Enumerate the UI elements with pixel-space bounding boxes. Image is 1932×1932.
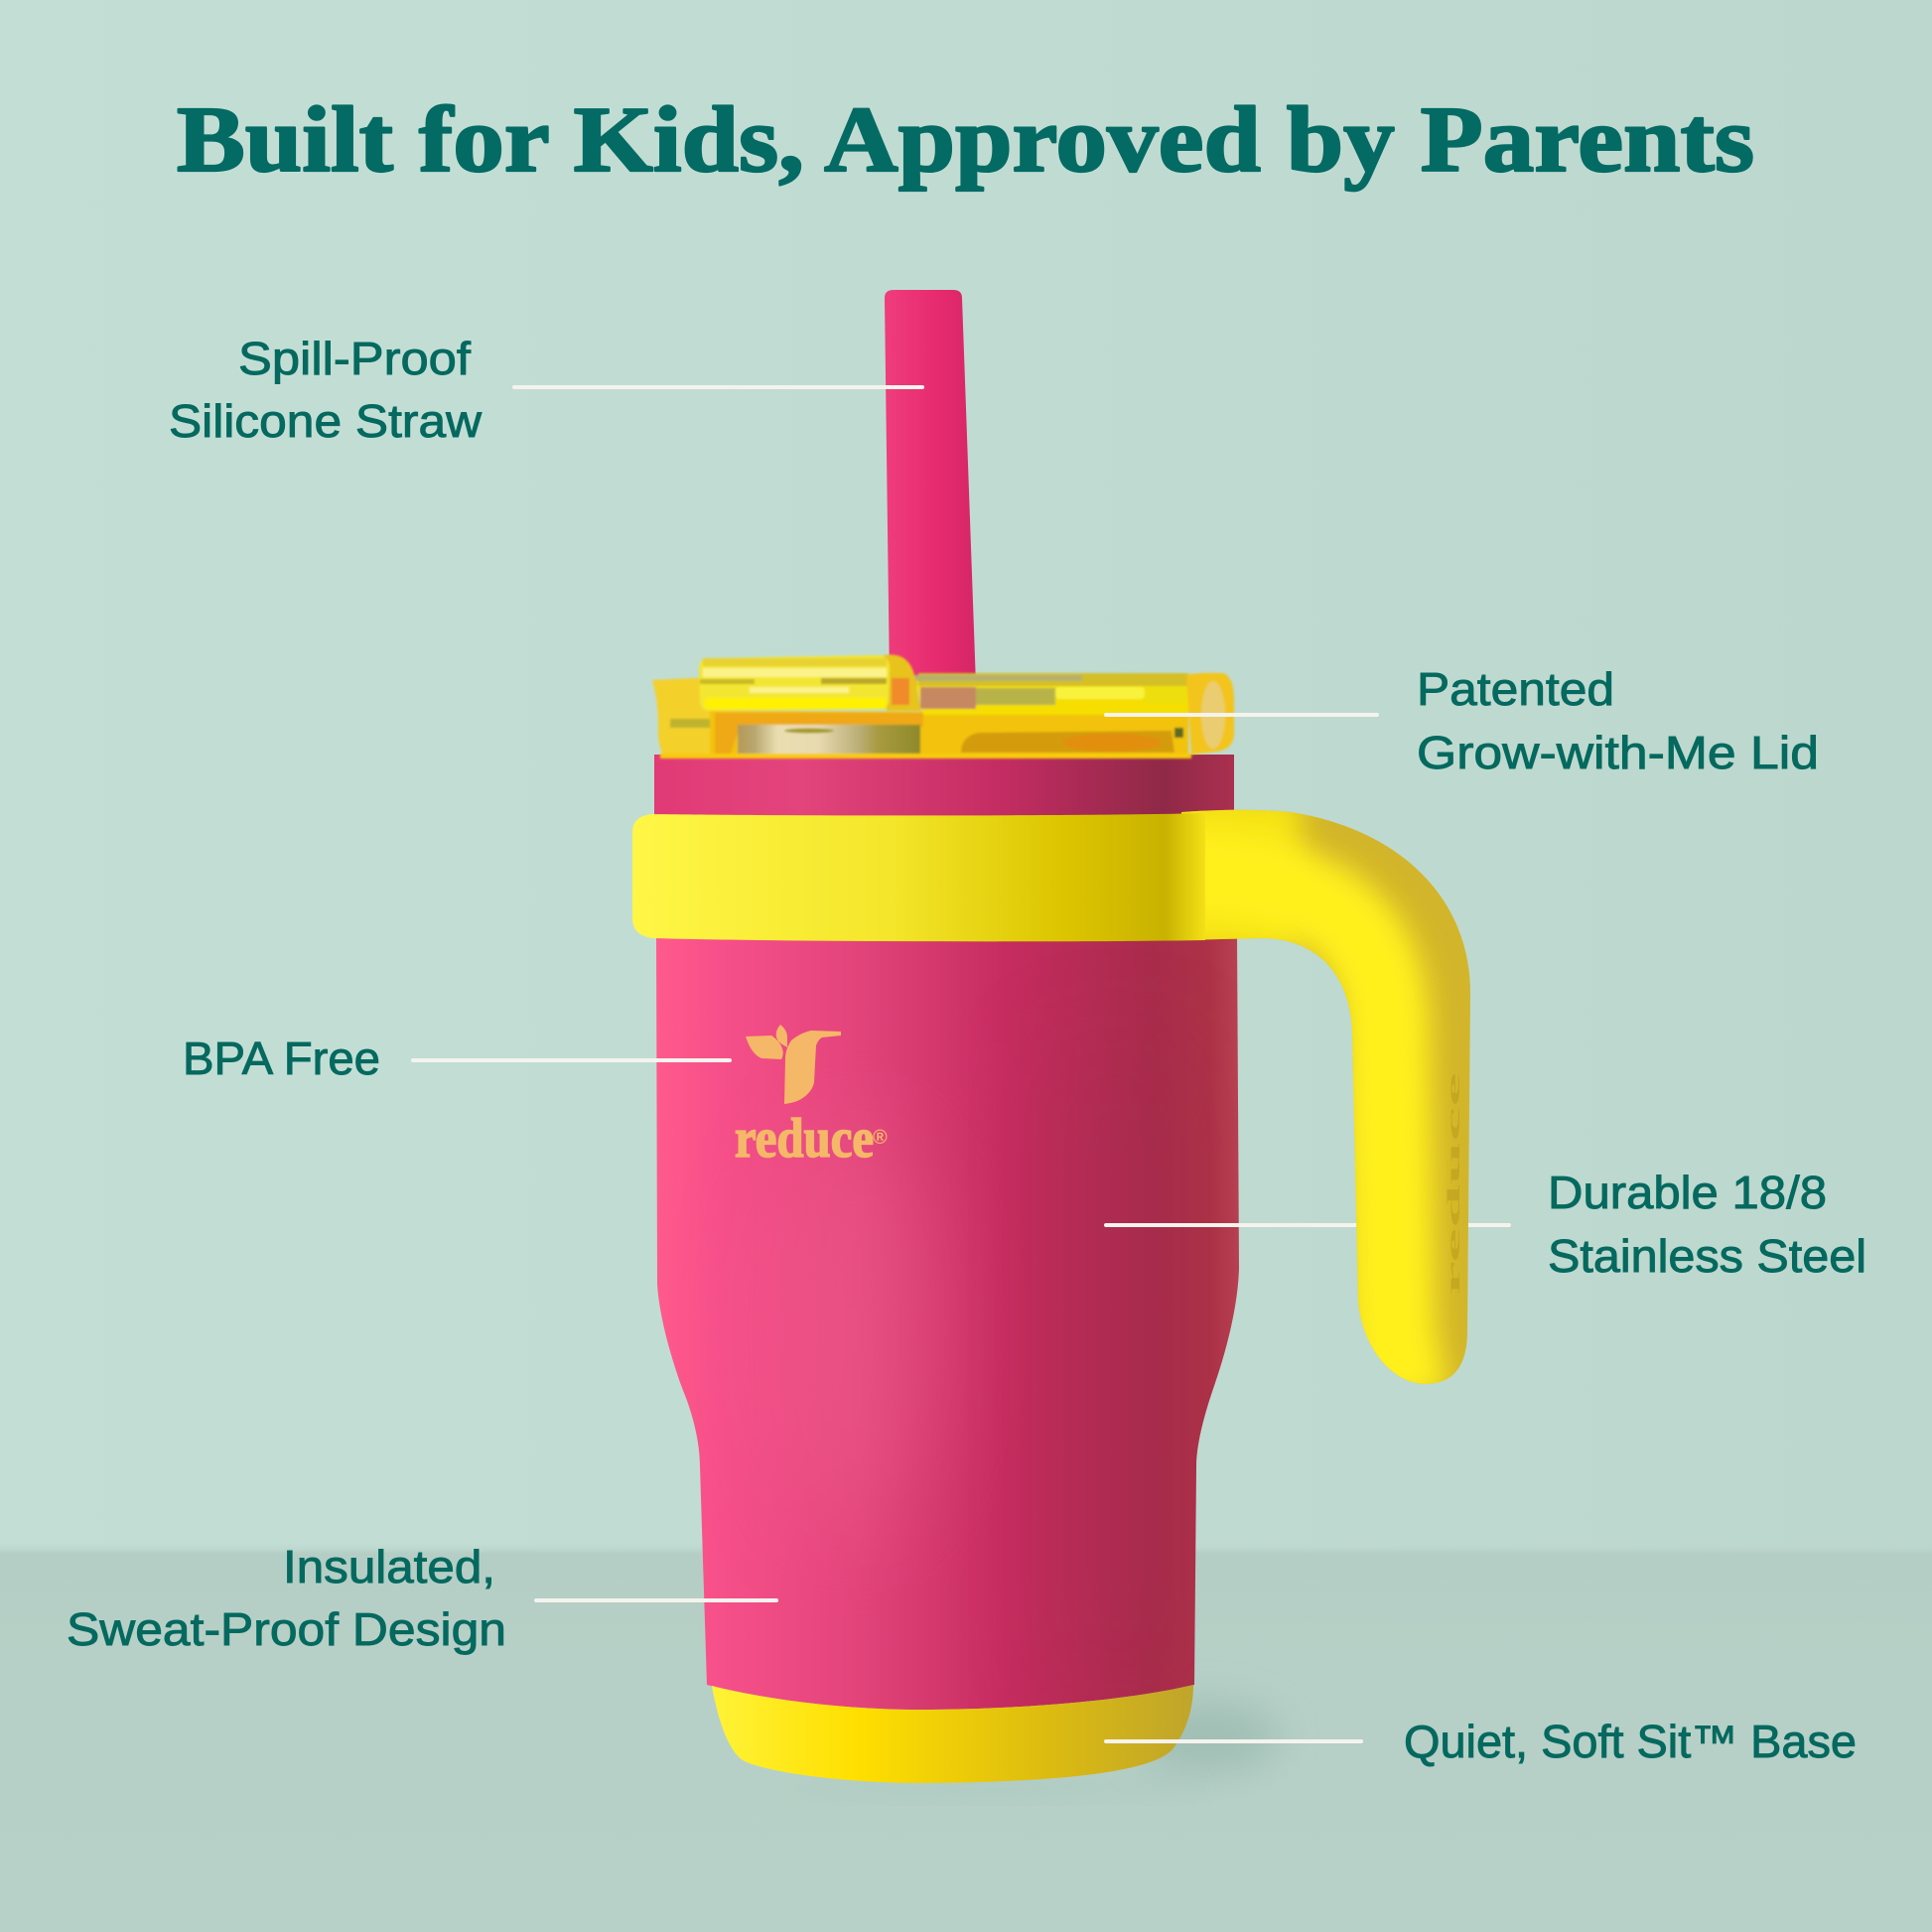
handle embossed wordmark: reduce — [1444, 1072, 1463, 1296]
straw — [885, 290, 976, 685]
lid left rim stripe — [670, 719, 713, 728]
flap olive band left — [700, 679, 755, 684]
label: insulated sweat-proof design: Insulated, — [283, 1541, 495, 1592]
flap top shade — [703, 658, 887, 666]
label: durable stainless steel: Durable 18/8 — [1548, 1167, 1827, 1218]
flap end orange — [892, 678, 909, 705]
label: insulated sweat-proof design — [67, 1541, 506, 1655]
leader line: lid — [1104, 713, 1379, 717]
flap olive band right — [821, 678, 887, 684]
lid right cap — [1186, 673, 1234, 755]
clear bar top dark line — [894, 675, 1082, 681]
label: insulated sweat-proof design: Sweat-Proof Design — [67, 1603, 506, 1655]
label: quiet soft sit base: Quiet, Soft Sit™ Base — [1404, 1716, 1857, 1767]
label: durable stainless steel: Stainless Steel — [1548, 1230, 1866, 1282]
recess orange blotch — [1062, 734, 1162, 752]
insulated tumbler body — [656, 933, 1239, 1710]
label: BPA free: BPA Free — [183, 1033, 380, 1084]
lid left rim — [652, 677, 730, 759]
clear bar grey reflection — [976, 688, 1055, 705]
logo leaf mark — [746, 1025, 841, 1104]
label: spill-proof silicone straw: Spill-Proof — [238, 333, 471, 384]
label: patented lid: Grow-with-Me Lid — [1417, 727, 1819, 778]
lid window lens — [784, 729, 834, 733]
logo wordmark: reduce — [735, 1108, 874, 1170]
clear bar top edge — [918, 673, 1188, 686]
flap bottom — [705, 698, 887, 709]
label: durable stainless steel — [1548, 1167, 1866, 1282]
leader line: insulated — [534, 1598, 778, 1602]
label: patented lid: Patented — [1417, 663, 1614, 715]
leader line: BPA free — [411, 1058, 732, 1062]
clear bar right reflection — [1145, 687, 1186, 703]
lid flap — [699, 655, 890, 711]
clear bar bright reflection — [1055, 687, 1145, 699]
soft sit base — [712, 1685, 1193, 1783]
lid clear bar — [914, 673, 1188, 715]
logo on tumbler — [735, 1025, 888, 1170]
lid dark detail — [1174, 728, 1183, 738]
lid — [652, 654, 1234, 759]
flap highlight — [703, 668, 887, 677]
lid orange section — [715, 713, 923, 757]
flap mid highlight — [750, 687, 849, 693]
handle — [1172, 794, 1470, 1400]
yellow ring — [632, 813, 1205, 941]
lid lower band — [710, 711, 1188, 759]
label: spill-proof silicone straw: Silicone Straw — [169, 395, 483, 447]
logo registered mark: ® — [873, 1127, 888, 1149]
floor shadow — [784, 1702, 1281, 1799]
title: Built for Kids, Approved by Parents — [177, 88, 1754, 192]
leader line: stainless steel — [1104, 1223, 1511, 1227]
upper pink band — [654, 755, 1234, 818]
label: patented lid — [1417, 663, 1819, 778]
leader line: straw — [512, 385, 924, 389]
lid window — [738, 725, 920, 754]
background floor — [0, 1542, 1932, 1932]
flap end cap — [884, 654, 921, 711]
lid right recess — [961, 731, 1174, 753]
leader line: base — [1104, 1739, 1363, 1743]
lid lower bottom strip — [660, 754, 1191, 759]
lid right cap lens — [1201, 681, 1225, 749]
label: spill-proof silicone straw — [169, 333, 483, 447]
straw seen through lid — [920, 687, 976, 709]
